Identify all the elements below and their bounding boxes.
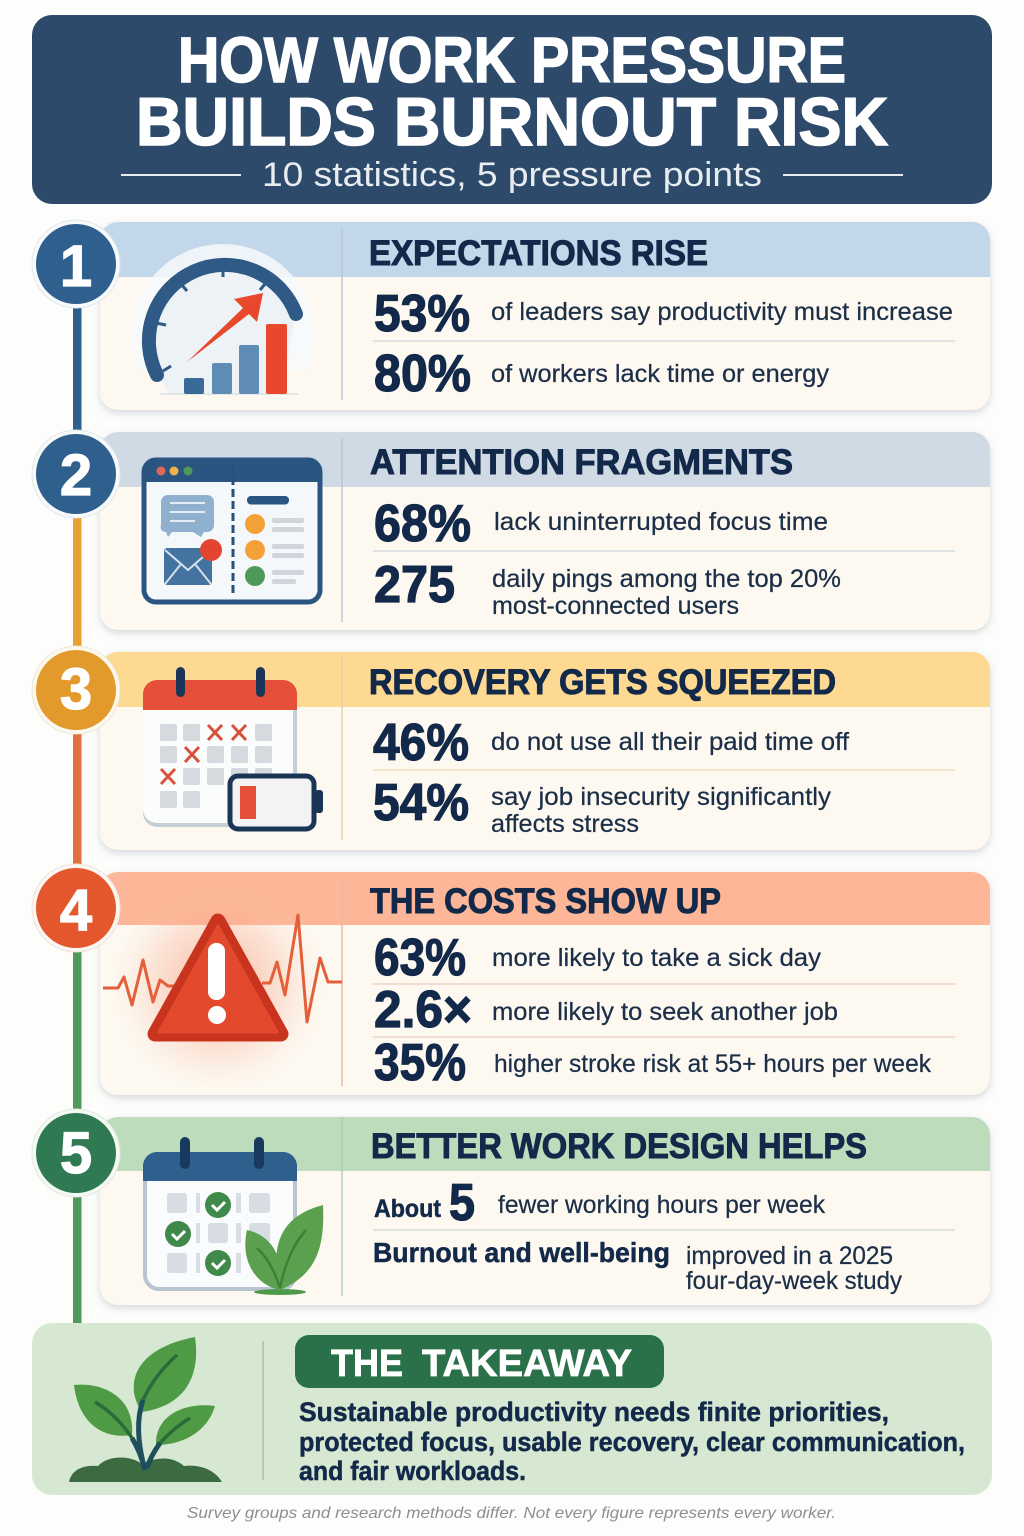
takeaway text: Sustainable productivity needs finite priorities,: [299, 1397, 889, 1427]
step number 3: [32, 646, 120, 734]
stat: 63%: [374, 929, 822, 987]
panel 2: attention fragments: [100, 432, 990, 630]
title: HOW WORK PRESSURE: [178, 24, 846, 96]
stat: 46%: [373, 714, 849, 772]
stat: 275: 275: [374, 556, 455, 614]
stat: 68%: lack uninterrupted focus time: [494, 508, 828, 536]
title: BUILDS BURNOUT RISK: [136, 84, 888, 160]
stat: 63%: 63%: [374, 929, 466, 987]
takeaway text: protected focus, usable recovery, clear communication,: [299, 1427, 965, 1457]
stat: 275: [374, 556, 841, 620]
step number 2: [32, 430, 120, 518]
stat: 54%: 54%: [373, 774, 469, 832]
stat: about 5: [374, 1174, 825, 1232]
step number 5: 5: [60, 1121, 92, 1186]
stat: about 5: fewer working hours per week: [498, 1191, 825, 1219]
stat: 35%: [374, 1034, 931, 1092]
stat: 68%: [374, 495, 828, 553]
takeaway badge: THE: [331, 1343, 403, 1385]
panel 3: recovery gets squeezed: [100, 652, 990, 850]
heading: EXPECTATIONS RISE: [369, 234, 708, 273]
stat: 46%: do not use all their paid time off: [491, 728, 849, 756]
step number 1: [32, 220, 120, 308]
heading: THE COSTS SHOW UP: [370, 882, 721, 921]
stat: 80%: of workers lack time or energy: [491, 360, 830, 388]
step number 3: 3: [60, 657, 92, 722]
icon: calendar and low battery: [143, 667, 323, 829]
stat: 53%: of leaders say productivity must increase: [491, 298, 953, 326]
stat: burnout and well-being: improved in a 2025: [686, 1242, 893, 1270]
stat: about 5: About: [374, 1195, 442, 1223]
stat: 80%: [374, 345, 830, 403]
stat: burnout and well-being: Burnout and well-being: [373, 1237, 670, 1268]
icon: gauge with rising bars: [131, 244, 315, 395]
panel 4: the costs show up: [100, 872, 990, 1095]
timeline connector: [73, 264, 82, 1323]
stat: 2.6×: [374, 981, 838, 1039]
stat: burnout and well-being: [373, 1237, 902, 1295]
takeaway text: [299, 1397, 965, 1486]
stat: 68%: 68%: [374, 495, 471, 553]
panel 5: better work design helps: [100, 1117, 990, 1305]
panel 1: expectations rise: [100, 222, 990, 428]
stat: 54%: affects stress: [491, 810, 639, 838]
title: [136, 24, 888, 160]
stat: 53%: 53%: [374, 285, 470, 343]
stat: 54%: [373, 774, 832, 838]
footnote: Survey groups and research methods differ. Not every figure represents every worker.: [187, 1505, 836, 1522]
stat: 2.6×: 2.6×: [374, 981, 472, 1039]
stat: 46%: 46%: [373, 714, 469, 772]
stat: burnout and well-being: four-day-week study: [686, 1267, 902, 1295]
step number 4: 4: [60, 878, 92, 943]
stat: about 5: 5: [449, 1174, 475, 1232]
heading: ATTENTION FRAGMENTS: [370, 443, 793, 482]
takeaway badge: [295, 1335, 664, 1388]
icon: warning triangle with pulse: [103, 877, 342, 1093]
step number 1: 1: [60, 234, 92, 299]
stat: 35%: higher stroke risk at 55+ hours per week: [494, 1050, 931, 1078]
stat: 275: most-connected users: [492, 592, 739, 620]
stat: 63%: more likely to take a sick day: [492, 944, 822, 972]
stat: 54%: say job insecurity significantly: [491, 783, 832, 811]
subtitle: 10 statistics, 5 pressure points: [262, 156, 762, 194]
takeaway text: and fair workloads.: [299, 1456, 526, 1486]
heading: RECOVERY GETS SQUEEZED: [369, 663, 836, 702]
stat: 275: daily pings among the top 20%: [492, 565, 841, 593]
heading: BETTER WORK DESIGN HELPS: [371, 1127, 867, 1166]
takeaway badge: TAKEAWAY: [422, 1343, 632, 1385]
icon: sprout on mound: [69, 1337, 222, 1482]
icon: split app window: [144, 460, 320, 602]
step number 4: [32, 864, 120, 952]
icon: calendar with checks and sprout: [143, 1137, 323, 1295]
stat: 2.6×: more likely to seek another job: [492, 998, 838, 1026]
panel: the takeaway: [32, 1323, 992, 1495]
stat: 80%: 80%: [374, 345, 471, 403]
stat: 53%: [374, 285, 953, 343]
header banner: [32, 15, 992, 204]
stat: 35%: 35%: [374, 1034, 466, 1092]
step number 2: 2: [60, 443, 92, 508]
step number 5: [32, 1109, 120, 1197]
